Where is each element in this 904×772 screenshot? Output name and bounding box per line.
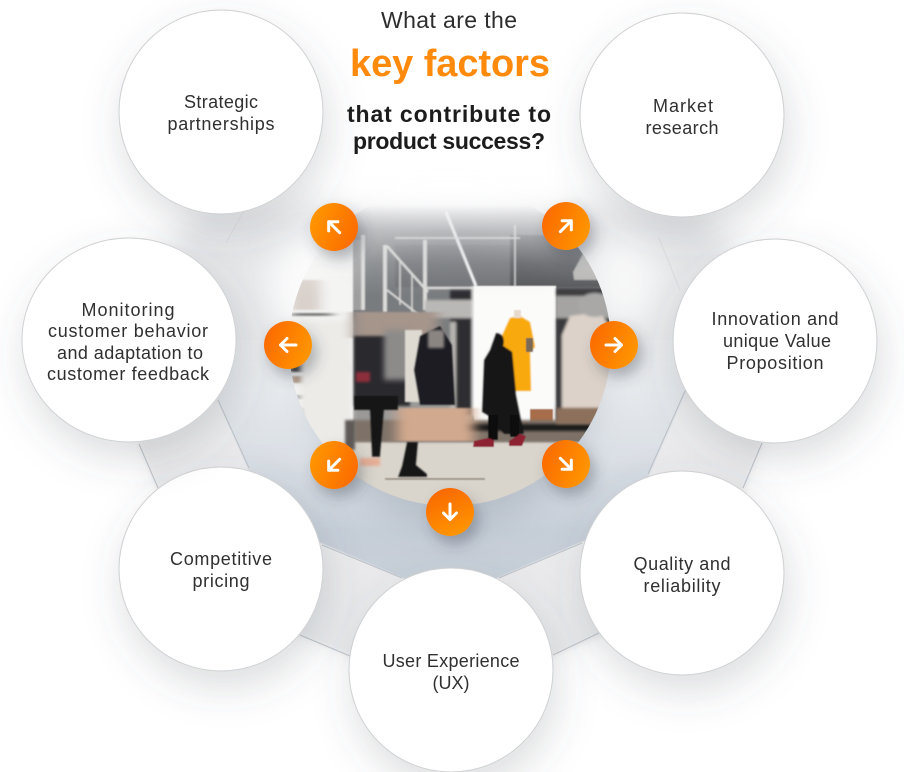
store display panel [474, 286, 556, 423]
circle: Monitoring customer behavior: Monitoring [82, 300, 174, 320]
circle: Strategic partnerships: partnerships [168, 114, 274, 134]
arrow badge: right [590, 321, 638, 369]
circle: Strategic partnerships: Strategic [184, 92, 258, 112]
circle: User Experience (UX): (UX) [432, 673, 470, 693]
circle: Innovation and unique Value Proposition: Innovation and [712, 309, 838, 329]
title: What are the [381, 7, 517, 33]
upper right awning [572, 254, 598, 281]
central photo: shop window street scene [290, 209, 610, 504]
background glow [110, 205, 795, 698]
circle: Competitive pricing [119, 467, 323, 671]
left horizontal motion blur [288, 280, 340, 418]
circle: Monitoring customer behavior: customer feedback [47, 364, 210, 384]
arrow badge: down [426, 488, 474, 536]
arrow badge: down-left [310, 441, 358, 489]
circle: Innovation and unique Value Proposition: Proposition [726, 353, 824, 373]
circle: Market research: Market [653, 96, 713, 116]
left blurred white figure [290, 242, 354, 421]
circle: Monitoring customer behavior [22, 238, 236, 442]
circle: Competitive pricing: pricing [192, 571, 250, 591]
photo shadow [315, 245, 595, 525]
connector lines [139, 212, 762, 656]
circle: Quality and reliability: Quality and [634, 554, 730, 574]
circle: Monitoring customer behavior: customer behavior [48, 321, 208, 341]
title [347, 7, 551, 154]
circle: Innovation and unique Value Proposition [673, 239, 877, 443]
title: product success? [353, 128, 545, 154]
inner heptagon backdrop [190, 340, 710, 598]
circle: Quality and reliability: reliability [644, 576, 720, 596]
circle: Monitoring customer behavior: and adaptation to [57, 343, 203, 363]
arrow badge: left [264, 321, 312, 369]
circle: User Experience (UX) [349, 568, 553, 772]
right rack and coats [556, 288, 616, 425]
rail and shelves [425, 286, 476, 416]
title: key factors [350, 43, 550, 85]
blurred pedestrians [300, 312, 526, 477]
arrow badge: up-right [542, 202, 590, 250]
circle: Quality and reliability [580, 471, 784, 675]
pavement and shopfront base [353, 406, 598, 504]
circle: Innovation and unique Value Proposition: unique Value [723, 331, 831, 351]
circle: Market research: research [646, 118, 718, 138]
arrow badge: up-left [310, 203, 358, 251]
circle: User Experience (UX): User Experience [382, 651, 520, 671]
circle: Market research [580, 13, 784, 217]
soft white glows beside the photo [268, 163, 657, 335]
circle: Competitive pricing: Competitive [170, 549, 272, 569]
arrow badge: down-right [542, 440, 590, 488]
circle: Strategic partnerships [119, 10, 323, 214]
title: that contribute to [347, 101, 551, 127]
